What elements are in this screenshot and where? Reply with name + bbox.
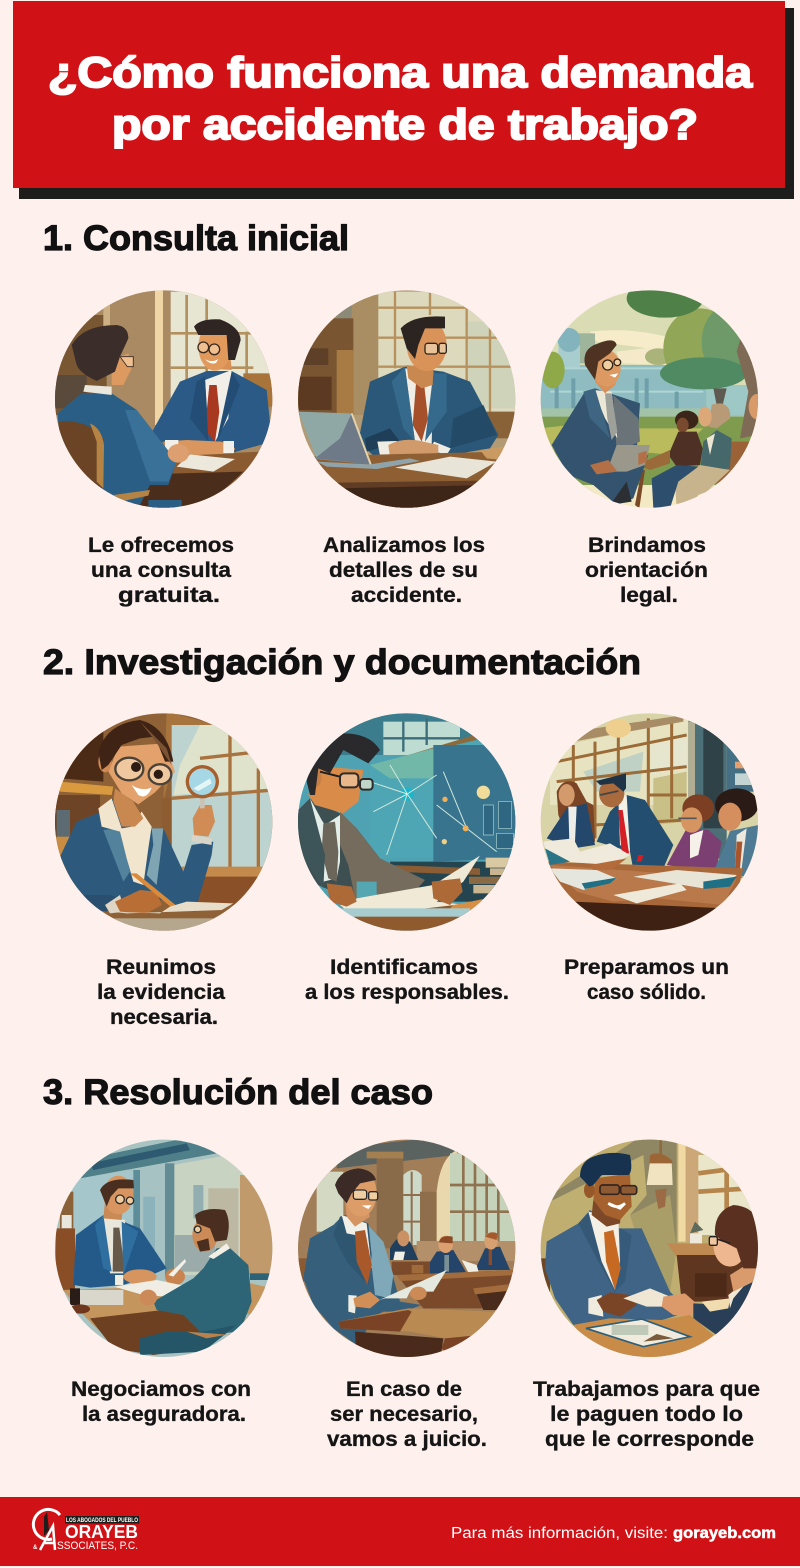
- caption: analizar detalles: [323, 534, 485, 607]
- footer call to action: Para más información, visite:: [451, 1525, 668, 1542]
- section 3: Resolución del caso: [40, 1073, 770, 1451]
- section 2: Investigación y documentación: [40, 643, 770, 1029]
- caption: orientación legal: legal.: [620, 584, 678, 607]
- caption: negociar con aseguradora: la aseguradora.: [82, 1403, 246, 1426]
- illustration: handing over a settlement document: [540, 1140, 758, 1357]
- footer bar: [0, 1497, 800, 1566]
- illustration: attorney analysing accident details at a laptop: [298, 290, 516, 508]
- caption: ir a juicio: [327, 1378, 487, 1451]
- caption: reunir evidencia: necesaria.: [110, 1006, 218, 1029]
- caption: identificar responsables: Identificamos: [330, 956, 478, 979]
- title banner: por accidente de trabajo?: [112, 101, 698, 149]
- illustration: attorney giving legal guidance in a park: [540, 290, 758, 508]
- logo: Gorayeb & Associates: [33, 1509, 139, 1552]
- title banner: ¿Cómo funciona una demanda: [48, 49, 753, 97]
- caption: identificar responsables: [305, 956, 509, 1004]
- caption: reunir evidencia: [97, 956, 225, 1029]
- caption: pago completo: que le corresponde: [545, 1428, 754, 1451]
- caption: consulta gratuita: [88, 534, 234, 607]
- caption: preparar caso: caso sólido.: [587, 981, 706, 1004]
- section 1: Consulta inicial: [40, 219, 770, 607]
- caption: negociar con aseguradora: [71, 1378, 251, 1426]
- caption: pago completo: Trabajamos para que: [533, 1378, 760, 1401]
- illustration: woman with magnifying glass gathering evidence: [55, 713, 272, 931]
- caption: identificar responsables: a los responsables.: [305, 981, 509, 1004]
- illustration: legal team preparing a case at a table: [540, 713, 758, 931]
- caption: analizar detalles: detalles de su: [329, 559, 478, 582]
- caption: pago completo: le paguen todo lo: [550, 1403, 743, 1426]
- caption: ir a juicio: En caso de: [346, 1378, 462, 1401]
- caption: analizar detalles: accidente.: [351, 584, 462, 607]
- illustration: negotiating with the insurer in a high-rise office: [55, 1140, 272, 1357]
- title banner: [13, 1, 794, 199]
- caption: orientación legal: orientación: [585, 559, 708, 582]
- caption: consulta gratuita: una consulta: [91, 559, 231, 582]
- logo: Gorayeb & Associates: SSOCIATES, P.C.: [57, 1540, 138, 1552]
- caption: reunir evidencia: Reunimos: [106, 956, 216, 979]
- caption: ir a juicio: ser necesario,: [330, 1403, 478, 1426]
- caption: orientación legal: [585, 534, 708, 607]
- caption: consulta gratuita: gratuita.: [118, 584, 220, 607]
- footer call to action: [451, 1525, 776, 1542]
- caption: pago completo: [533, 1378, 760, 1451]
- logo: Gorayeb & Associates: LOS ABOGADOS DEL PUEBLO: [66, 1518, 138, 1524]
- heading: step 3: 3. Resolución del caso: [43, 1073, 433, 1112]
- footer call to action: gorayeb.com: [673, 1525, 776, 1542]
- caption: negociar con aseguradora: Negociamos con: [71, 1378, 251, 1401]
- logo: Gorayeb & Associates: &: [33, 1545, 38, 1551]
- logo: Gorayeb & Associates: ORAYEB: [65, 1522, 138, 1542]
- caption: consulta gratuita: Le ofrecemos: [88, 534, 234, 557]
- caption: reunir evidencia: la evidencia: [97, 981, 225, 1004]
- heading: step 1: 1. Consulta inicial: [43, 219, 349, 258]
- illustration: lawyer presenting in a courtroom: [298, 1140, 516, 1357]
- illustration: analyst identifying those responsible: [298, 713, 516, 931]
- heading: step 2: 2. Investigación y documentación: [43, 643, 641, 682]
- caption: preparar caso: [564, 956, 729, 1004]
- caption: preparar caso: Preparamos un: [564, 956, 729, 979]
- caption: orientación legal: Brindamos: [588, 534, 706, 557]
- caption: analizar detalles: Analizamos los: [323, 534, 485, 557]
- caption: ir a juicio: vamos a juicio.: [327, 1428, 487, 1451]
- illustration: lawyer meeting a client at a desk: [55, 290, 272, 508]
